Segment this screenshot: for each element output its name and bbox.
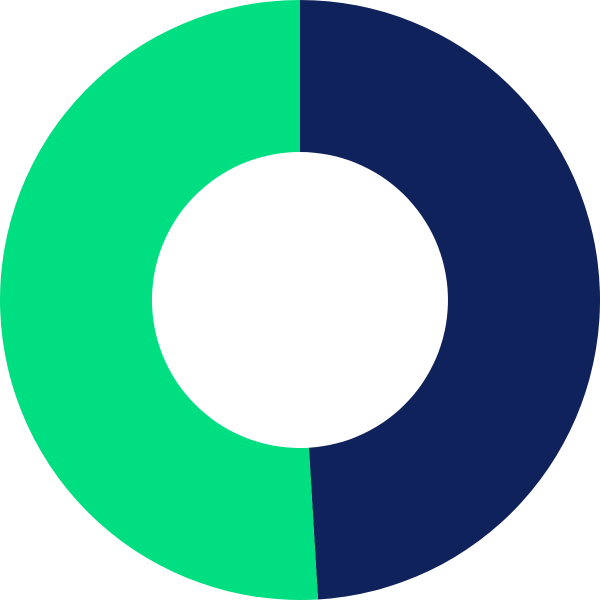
segment: green xyxy=(0,0,318,600)
segment: navy xyxy=(300,0,600,599)
